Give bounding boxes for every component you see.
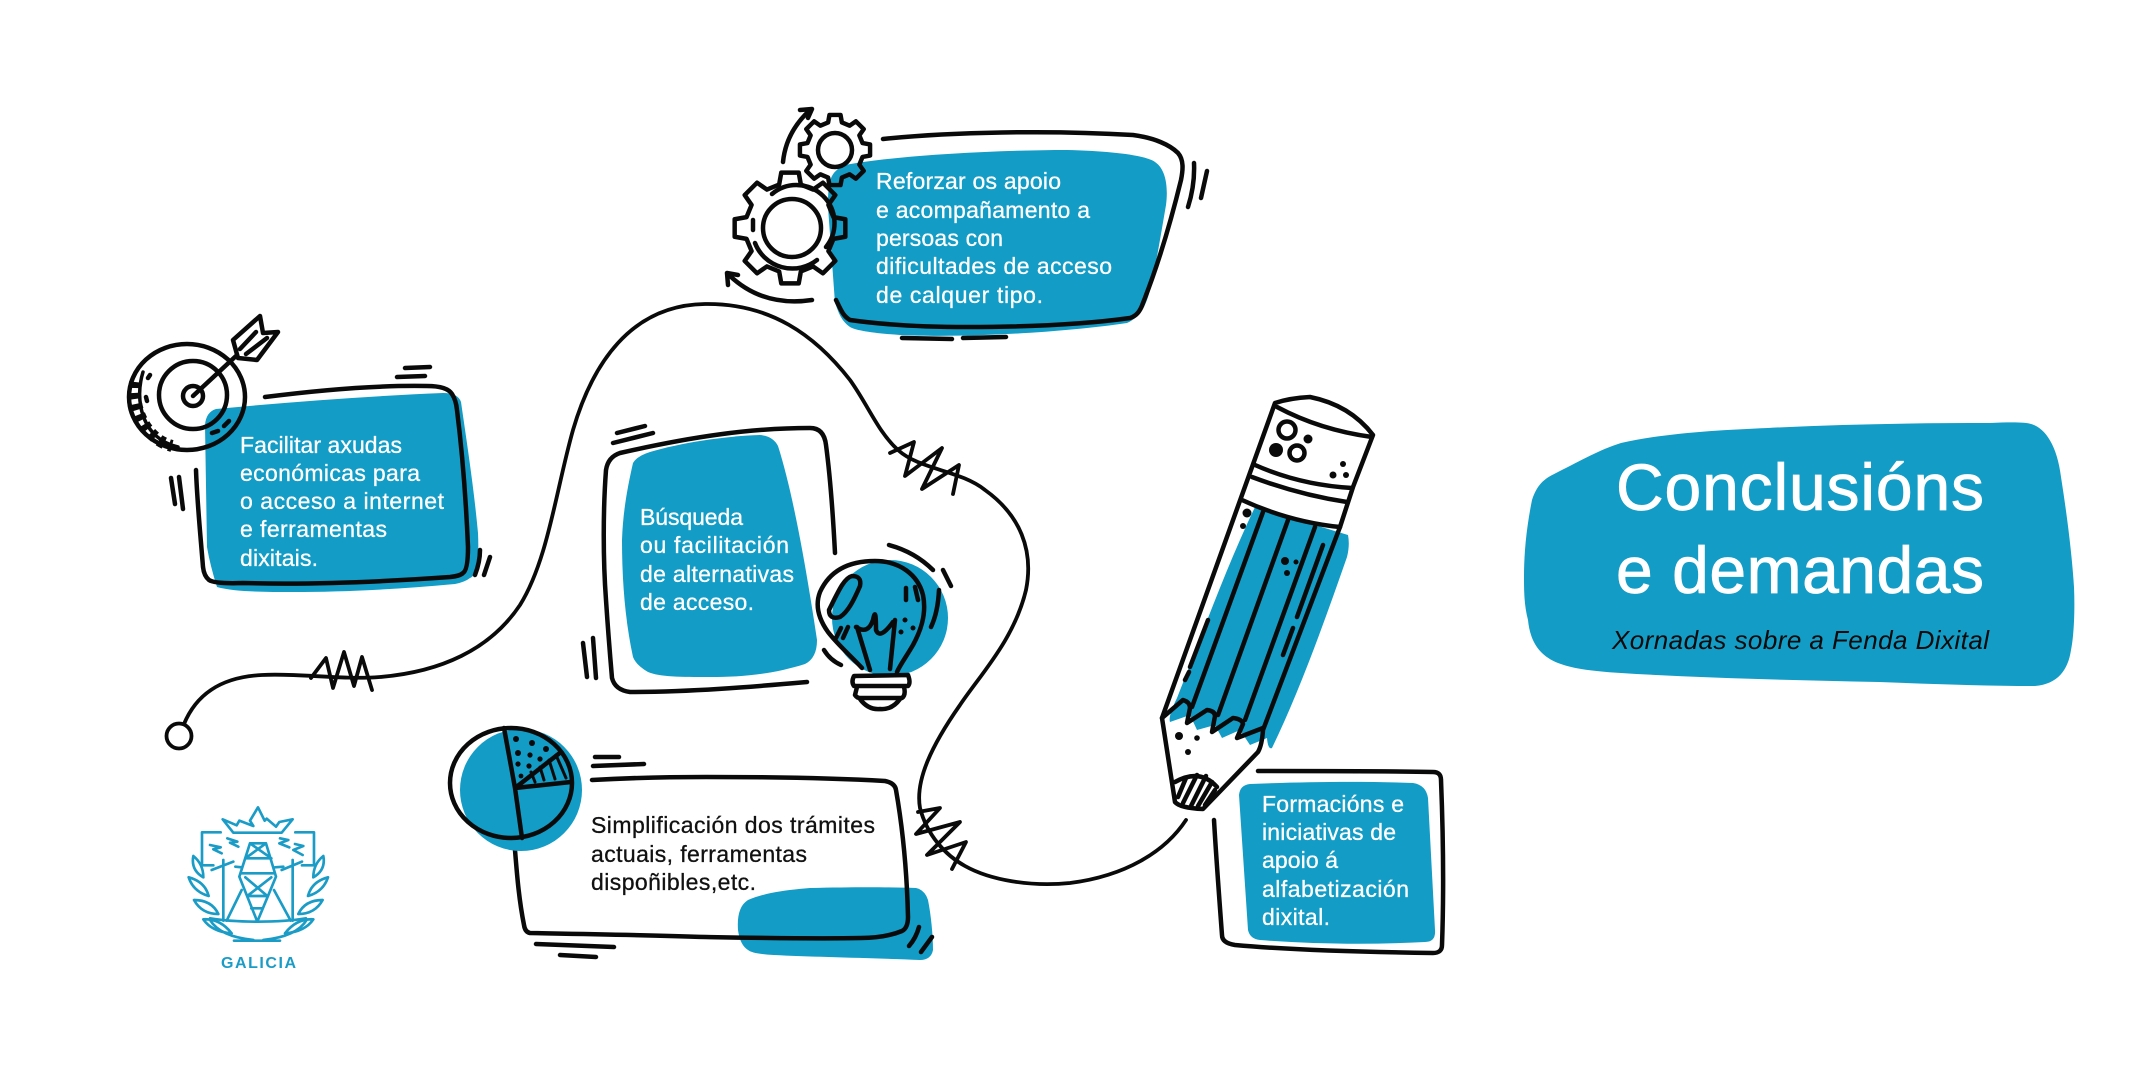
panel: facilitar axudas <box>129 316 490 592</box>
icon: pencil <box>1162 397 1373 809</box>
text: facilitar: o acceso a internet <box>240 488 445 514</box>
accent ticks: facilitar <box>171 367 490 575</box>
text: reforzar: e acompañamento a <box>876 197 1090 223</box>
panel: reforzar apoio <box>727 109 1207 339</box>
text: busqueda: Búsqueda <box>640 504 743 530</box>
text: busqueda: de alternativas <box>640 561 794 587</box>
text: reforzar: de calquer tipo. <box>876 282 1043 308</box>
text: formacions: Formacións e <box>1262 791 1404 817</box>
text: reforzar: Reforzar os apoio <box>876 168 1061 194</box>
line start circle <box>166 724 192 748</box>
text: facilitar <box>240 432 445 571</box>
title blob <box>1524 422 2074 686</box>
text: reforzar: persoas con <box>876 225 1003 251</box>
text: simplificacion: actuais, ferramentas <box>591 841 807 867</box>
icon: target with arrow <box>129 316 278 450</box>
logo wordmark: GALICIA <box>221 955 296 972</box>
zigzag: lower <box>916 808 966 869</box>
hand-drawn border: simplificacion <box>515 777 908 938</box>
hand-drawn border: facilitar <box>196 386 468 584</box>
title text: Conclusións <box>1616 450 1984 524</box>
text: busqueda: de acceso. <box>640 589 754 615</box>
blue blob: reforzar <box>828 150 1167 336</box>
text: busqueda <box>640 504 794 615</box>
panel: formacions e iniciativas <box>1214 771 1443 953</box>
blue blob: busqueda <box>622 435 817 677</box>
subtitle: Xornadas sobre a Fenda Dixital <box>1611 625 1990 655</box>
text: simplificacion: Simplificación dos trámites <box>591 812 875 838</box>
accent ticks: simplificacion <box>536 757 932 957</box>
icon: gears <box>727 109 870 301</box>
title text <box>1616 450 1984 607</box>
panel: busqueda de alternativas <box>583 426 951 709</box>
text: formacions: iniciativas de <box>1262 819 1396 845</box>
hand-drawn border: formacions <box>1214 771 1443 953</box>
text: facilitar: dixitais. <box>240 545 318 571</box>
text: simplificacion <box>591 812 875 895</box>
text: formacions: apoio á <box>1262 847 1338 873</box>
icon: light bulb <box>818 545 951 709</box>
accent ticks: reforzar <box>902 163 1207 339</box>
text: simplificacion: dispoñibles,etc. <box>591 869 756 895</box>
zigzag: left <box>311 652 372 690</box>
panel: simplificacion dos tramites <box>450 728 933 960</box>
text: busqueda: ou facilitación <box>640 532 789 558</box>
blue blob: simplificacion <box>738 887 933 960</box>
accent ticks: busqueda <box>583 426 653 678</box>
text: formacions <box>1262 791 1409 930</box>
panel: title <box>1524 422 2074 686</box>
zigzag: middle <box>890 442 959 494</box>
text: facilitar: Facilitar axudas <box>240 432 402 458</box>
text: reforzar: dificultades de acceso <box>876 253 1112 279</box>
logo: Galicia emblem <box>189 807 328 972</box>
text: reforzar <box>876 168 1112 308</box>
blue blob: formacions <box>1239 782 1435 944</box>
title text: e demandas <box>1616 533 1984 607</box>
text: formacions: alfabetización <box>1262 876 1409 902</box>
hand-drawn border: reforzar <box>836 132 1183 327</box>
text: formacions: dixital. <box>1262 904 1330 930</box>
text: facilitar: e ferramentas <box>240 516 387 542</box>
icon: pie chart <box>450 728 582 851</box>
text: facilitar: económicas para <box>240 460 420 486</box>
connecting squiggle line <box>166 304 1186 884</box>
hand-drawn border: busqueda <box>604 428 835 692</box>
blue blob: facilitar <box>205 393 478 592</box>
